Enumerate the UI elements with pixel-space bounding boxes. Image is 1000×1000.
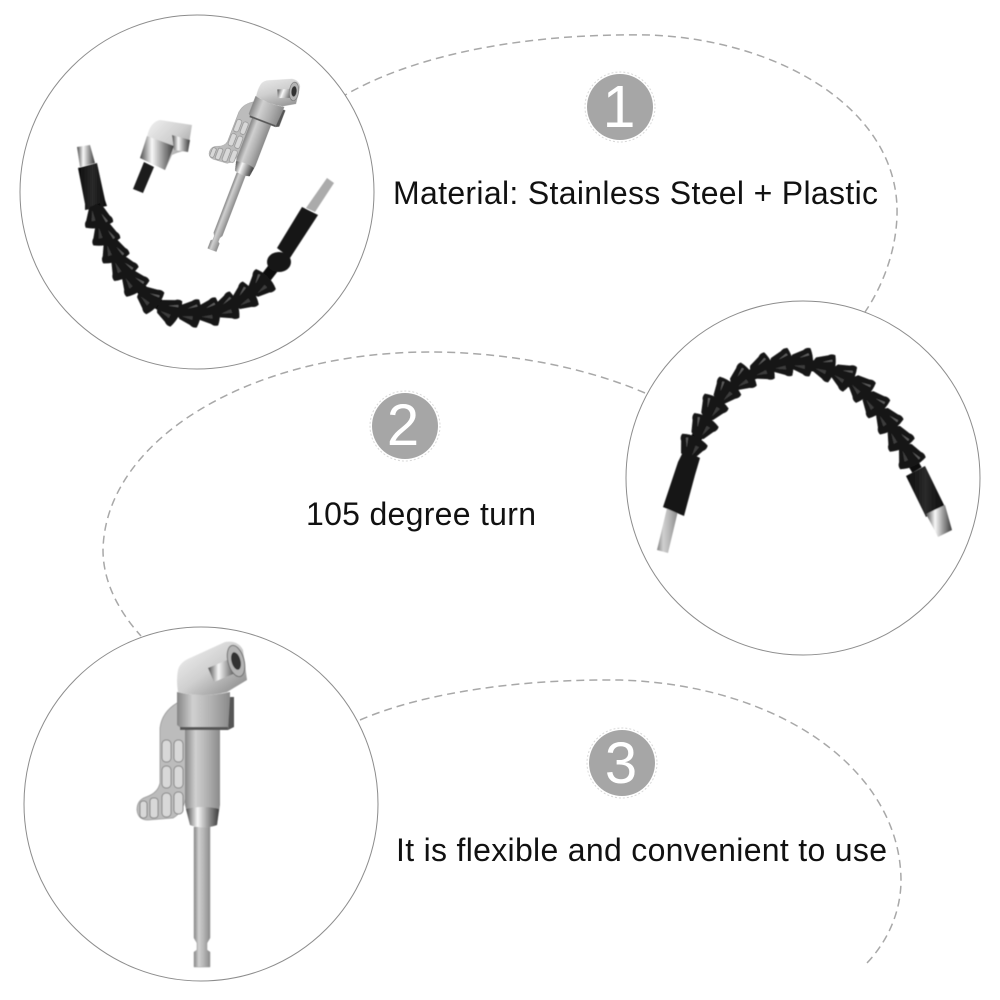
panel: circle 1 with tools and flexible shaft <box>20 15 374 369</box>
number badge 1 <box>585 72 655 142</box>
panel: circle 2 with flexible shaft <box>626 301 980 655</box>
icon: angle adapter <box>137 642 248 967</box>
dashed connector 3 <box>360 680 901 965</box>
dashed connector 2 <box>103 352 645 636</box>
text: turn angle: 105 degree turn <box>306 496 536 532</box>
icon: flexible shaft <box>657 347 952 553</box>
number badge 3 <box>587 728 657 798</box>
number badge 2: 2 <box>387 393 419 458</box>
icon: large angle adapter <box>177 60 304 260</box>
panel: circle 3 with angle adapter <box>24 627 378 981</box>
text: material: Material: Stainless Steel + Plastic <box>393 175 878 211</box>
number badge 1: 1 <box>603 74 635 140</box>
number badge 3: 3 <box>605 731 637 796</box>
dashed connector 1 <box>340 35 897 312</box>
number badge 2 <box>370 391 440 461</box>
icon: flexible shaft <box>77 145 334 328</box>
text: flexibility: It is flexible and convenient to use <box>396 832 887 868</box>
icon: small angle adapter <box>133 120 192 193</box>
